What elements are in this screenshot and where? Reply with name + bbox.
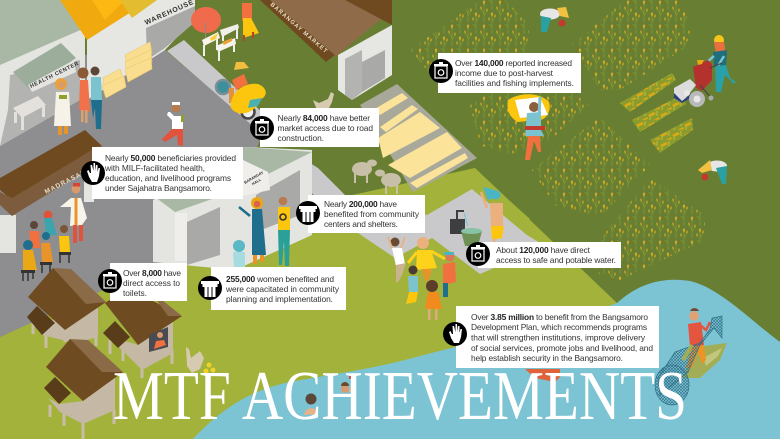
harvested rice rows [620, 73, 693, 153]
rice fields [410, 0, 705, 280]
callout: 84,000 market access: Nearly 84,000 have better [278, 113, 370, 123]
callout: 200,000 community centers [296, 195, 425, 233]
family: woman in hijab [54, 78, 71, 135]
light grey plaza and path [305, 160, 545, 274]
sacks [102, 42, 152, 98]
health center building [0, 0, 85, 146]
chicken and eggs [186, 347, 216, 374]
light green ground [0, 168, 617, 439]
orange boat [525, 369, 560, 382]
icon: pot [98, 269, 122, 293]
barangay hall [153, 147, 312, 270]
callout: 3.85 million development plan [443, 306, 659, 368]
light green strip beside plaza [472, 168, 530, 235]
callout: 50,000 beneficiaries: with MILF-facilitated health, [104, 163, 205, 173]
boy walking [162, 102, 184, 146]
callout: 50,000 beneficiaries: under Sajahatra Bangsamoro. [105, 183, 212, 193]
callout: 3.85 million development plan: of social services, promote jobs and livelihood, and [471, 343, 653, 353]
callout: 120,000 water [466, 242, 621, 268]
callout: 255,000 women: planning and implementation. [226, 294, 333, 304]
callout: 120,000 water: About 120,000 have direct [496, 245, 591, 255]
callout: 84,000 market access [250, 108, 379, 147]
motorbike with hay [216, 62, 266, 118]
callout: 140,000 income: income due to post-harvest [455, 68, 554, 78]
callout: 8,000 toilets: Over 8,000 have [123, 268, 181, 278]
icon: pot [250, 116, 274, 140]
fisherman [686, 308, 710, 368]
dancing children [388, 237, 456, 320]
water tap and basin [450, 211, 482, 246]
seated students [21, 210, 71, 281]
callout: 3.85 million development plan: that will strengthen institutions, improve delivery [471, 332, 646, 342]
sign: madrasah: MADRASAH [44, 169, 88, 196]
warehouse [60, 0, 195, 100]
callout: 200,000 community centers: Nearly 200,000 have [324, 199, 397, 209]
callout: 3.85 million development plan: help establish security in the Bangsamoro. [471, 353, 623, 363]
callout: 120,000 water: access to safe and potable water. [496, 255, 616, 265]
callout: 8,000 toilets: direct access to [123, 278, 180, 288]
hut 3 [44, 339, 123, 439]
callout: 200,000 community centers: centers and shelters. [324, 219, 398, 229]
sign: barangay market: BARANGAY MARKET [269, 2, 329, 55]
bench [13, 96, 46, 130]
madrasah [0, 130, 102, 253]
farmer bending right [698, 160, 727, 184]
swimmers [304, 376, 355, 415]
callout: 255,000 women [198, 267, 346, 310]
market building [260, 0, 392, 100]
fishing net [655, 316, 722, 405]
callout: 140,000 income: facilities and fishing implements. [455, 78, 574, 88]
callout: 8,000 toilets [98, 263, 187, 301]
callout: 84,000 market access: construction. [278, 133, 324, 143]
hall figures: child [233, 240, 245, 267]
grey village road [0, 50, 262, 337]
sign: barangay hall: BARANGAY [244, 171, 264, 185]
green market lot [184, 7, 345, 112]
drying pad with grain [360, 84, 477, 192]
woman carrying water [481, 187, 504, 242]
farmer carrying grain [507, 94, 550, 160]
callout: 50,000 beneficiaries: education, and livelihood programs [105, 173, 231, 183]
callout: 50,000 beneficiaries: Nearly 50,000 beneficiaries provided [105, 153, 236, 163]
sheep [352, 160, 401, 194]
callout: 140,000 income [429, 53, 581, 93]
callout: 3.85 million development plan: Development Plan, which recommends programs [471, 322, 647, 332]
farmer with walking tractor [674, 35, 736, 107]
callout: 3.85 million development plan: Over 3.85 million to benefit from the Bangsamoro [471, 312, 648, 322]
sign: barangay hall: HALL [251, 177, 263, 186]
water [193, 280, 780, 439]
light grey sidewalk [167, 40, 262, 134]
sign: health center: HEALTH CENTER [29, 61, 80, 90]
callout: 255,000 women: 255,000 women benefited and [226, 274, 334, 284]
callout: 50,000 beneficiaries [81, 147, 243, 199]
market vendor [242, 3, 259, 41]
farmer bending top [540, 7, 569, 32]
callout: 84,000 market access: market access due to road [278, 123, 373, 133]
callout: 200,000 community centers: benefited from community [324, 209, 420, 219]
icon: pillars [296, 201, 320, 225]
callout: 255,000 women: were capacitated in community [225, 284, 340, 294]
hut 1 [27, 268, 106, 348]
chicken near market [313, 92, 334, 110]
icon: hand [443, 322, 467, 346]
callout: 8,000 toilets: toilets. [123, 288, 147, 298]
hut 2 [103, 288, 182, 378]
market umbrella and tables [191, 7, 239, 61]
icon: hand [81, 161, 105, 185]
icon: pot [429, 59, 453, 83]
hall figures: man [278, 197, 290, 266]
callout: 140,000 income: Over 140,000 reported increased [455, 58, 572, 68]
teacher [60, 183, 87, 243]
icon: pot [466, 242, 490, 266]
family: woman in red dress [78, 68, 90, 123]
family: man [90, 66, 102, 129]
icon: pillars [198, 276, 222, 300]
hall figures: woman in hijab [239, 197, 266, 264]
fisher's boat [683, 343, 727, 378]
